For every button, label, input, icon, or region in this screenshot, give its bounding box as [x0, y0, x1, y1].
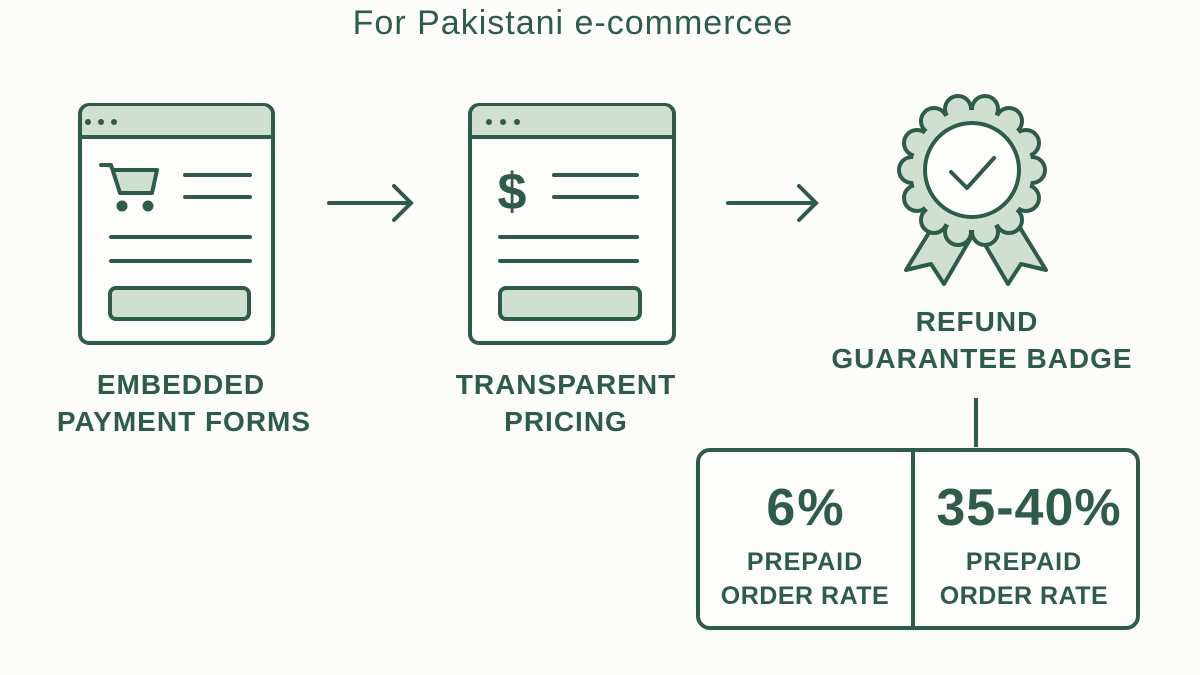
icon: pricing window	[470, 105, 674, 343]
label: embedded payment forms: EMBEDDED	[97, 369, 265, 400]
stat: 35-40%: PREPAID	[966, 548, 1082, 576]
stat: 35-40%: 35-40%	[936, 479, 1122, 537]
label: embedded payment forms	[57, 369, 311, 437]
label: refund guarantee badge	[831, 306, 1133, 374]
icon: payment form window	[80, 105, 273, 343]
stat: 35-40%: ORDER RATE	[940, 582, 1108, 610]
stats box	[698, 450, 1138, 628]
arrow 1	[329, 186, 411, 220]
stat: 35-40%	[936, 479, 1122, 610]
icon: refund badge	[899, 96, 1046, 284]
stat: 6%: PREPAID	[747, 548, 863, 576]
stat: 6%: ORDER RATE	[721, 582, 889, 610]
arrow 2	[728, 186, 816, 220]
label: transparent pricing: PRICING	[504, 406, 628, 437]
stat: 6%	[721, 479, 889, 610]
label: refund guarantee badge: REFUND	[916, 306, 1038, 337]
label: refund guarantee badge: GUARANTEE BADGE	[831, 343, 1133, 374]
icon: pricing window: $	[498, 163, 527, 221]
stat: 6%: 6%	[766, 479, 846, 537]
title: For Pakistani e-commercee	[353, 4, 793, 42]
label: transparent pricing: TRANSPARENT	[456, 369, 676, 400]
label: transparent pricing	[456, 369, 676, 437]
label: embedded payment forms: PAYMENT FORMS	[57, 406, 311, 437]
connector	[974, 398, 978, 447]
